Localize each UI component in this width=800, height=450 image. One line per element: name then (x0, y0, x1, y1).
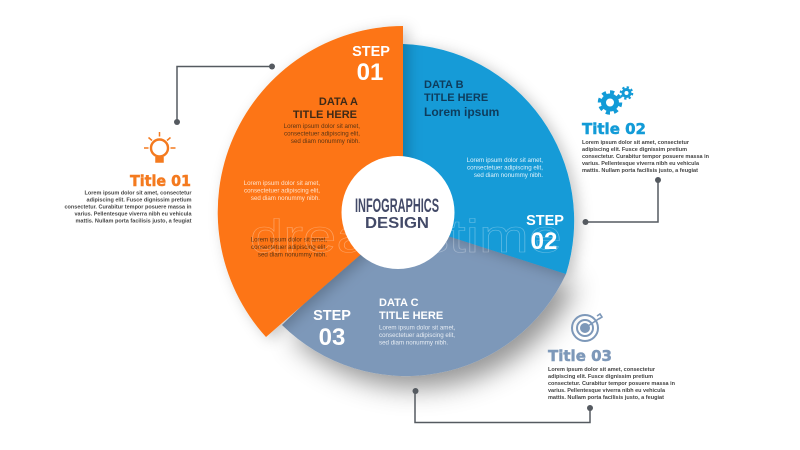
title 03: Title 03 (548, 347, 612, 365)
orange white text: consectetuer adipiscing elit, (244, 188, 320, 194)
data B heading: TITLE HERE (424, 92, 488, 104)
connector: step 03 (412, 388, 593, 422)
data B heading: Lorem ipsum (424, 105, 499, 119)
data A text (284, 123, 360, 145)
data A heading (293, 96, 358, 121)
step 02 label (526, 213, 564, 255)
orange dark text: Lorem ipsum dolor sit amet, (251, 236, 327, 244)
data A text: consectetuer adipiscing elit, (284, 130, 360, 138)
data A text: sed diam nonummy nibh. (291, 138, 360, 145)
centre title: INFOGRAPHICS (355, 195, 439, 217)
large gear (600, 92, 620, 113)
data B heading (424, 79, 499, 119)
data A heading: DATA A (319, 96, 358, 108)
step 01 label (352, 44, 390, 86)
centre title: DESIGN (365, 215, 429, 232)
connector: step 01 (174, 64, 275, 125)
title 01: Title 01 (130, 172, 191, 190)
title 01 text: Lorem ipsum dolor sit amet, consectetur (84, 190, 192, 196)
orange dark text: sed diam nonummy nibh. (258, 252, 327, 258)
data A heading: TITLE HERE (293, 109, 357, 121)
segment: step 01 orange (218, 26, 403, 337)
title 02 text (582, 140, 709, 174)
orange white text (244, 180, 320, 202)
title 03 text: Lorem ipsum dolor sit amet, consectetur (548, 367, 655, 373)
data C text: consectetuer adipiscing elit, (379, 332, 455, 339)
data C heading: TITLE HERE (379, 310, 443, 322)
connector: step 02 (582, 177, 661, 225)
data C text (379, 324, 456, 346)
data B text: sed diam nonummy nibh. (474, 172, 543, 179)
orange white text: Lorem ipsum dolor sit amet, (244, 180, 320, 187)
step 03 label (313, 308, 351, 351)
data C text: Lorem ipsum dolor sit amet, (379, 324, 456, 332)
step 01 label: STEP (352, 44, 390, 60)
step 03 label: 03 (319, 324, 345, 351)
step 01 label: 01 (357, 59, 383, 86)
icon: gears (600, 87, 632, 113)
title 02 text: mattis. Nullam porta facilisis justo, a feugiat (582, 168, 698, 174)
title 01 text: varius. Pellentesque viverra nibh eu vehicula (74, 212, 192, 218)
title 03 text: consectetur. Curabitur tempor posuere massa in (548, 381, 675, 387)
title 01 text: consectetur. Curabitur tempor posuere massa in (64, 204, 192, 210)
step 02 label: STEP (526, 213, 564, 229)
data B text: consectetuer adipiscing elit, (467, 164, 543, 172)
title 02 text: varius. Pellentesque viverra nibh eu vehicula (582, 161, 699, 167)
title 02 text: adipiscing elit. Fusce dignissim pretium (582, 147, 687, 153)
data C heading: DATA C (379, 297, 419, 309)
title 02: Title 02 (582, 120, 646, 138)
data A text: Lorem ipsum dolor sit amet, (284, 123, 360, 130)
title 03 text: varius. Pellentesque viverra nibh eu vehicula (548, 388, 665, 394)
title 02 text: consectetur. Curabitur tempor posuere massa in (582, 154, 709, 160)
centre title (355, 195, 439, 232)
title 03 text: mattis. Nullam porta facilisis justo, a feugiat (548, 395, 664, 401)
small gear (621, 87, 632, 99)
orange white text: sed diam nonummy nibh. (251, 195, 320, 202)
data B heading: DATA B (424, 79, 464, 91)
data B text (467, 157, 543, 179)
step 03 label: STEP (313, 308, 351, 324)
title 01 text: adipiscing elit. Fusce dignissim pretium (86, 198, 192, 204)
pie chart (218, 26, 574, 376)
data B text: Lorem ipsum dolor sit amet, (467, 157, 543, 164)
step 02 label: 02 (531, 228, 557, 255)
centre circle (342, 156, 454, 269)
segment: step 02 blue (398, 44, 574, 274)
orange dark text (251, 236, 327, 258)
title 02 text: Lorem ipsum dolor sit amet, consectetur (582, 140, 689, 146)
icon: target (572, 314, 602, 341)
icon: light bulb (144, 132, 176, 162)
segment: step 03 grey-blue (282, 212, 566, 376)
title 01 text: mattis. Nullam porta facilisis justo, a feugiat (76, 218, 192, 224)
data C text: sed diam nonummy nibh. (379, 340, 448, 346)
title 03 text: adipiscing elit. Fusce dignissim pretium (548, 374, 653, 380)
title 01 text (64, 190, 192, 224)
watermark: dreamstime (250, 210, 562, 262)
data C heading (379, 297, 443, 322)
orange dark text: consectetuer adipiscing elit, (251, 244, 327, 251)
title 03 text (548, 367, 675, 401)
